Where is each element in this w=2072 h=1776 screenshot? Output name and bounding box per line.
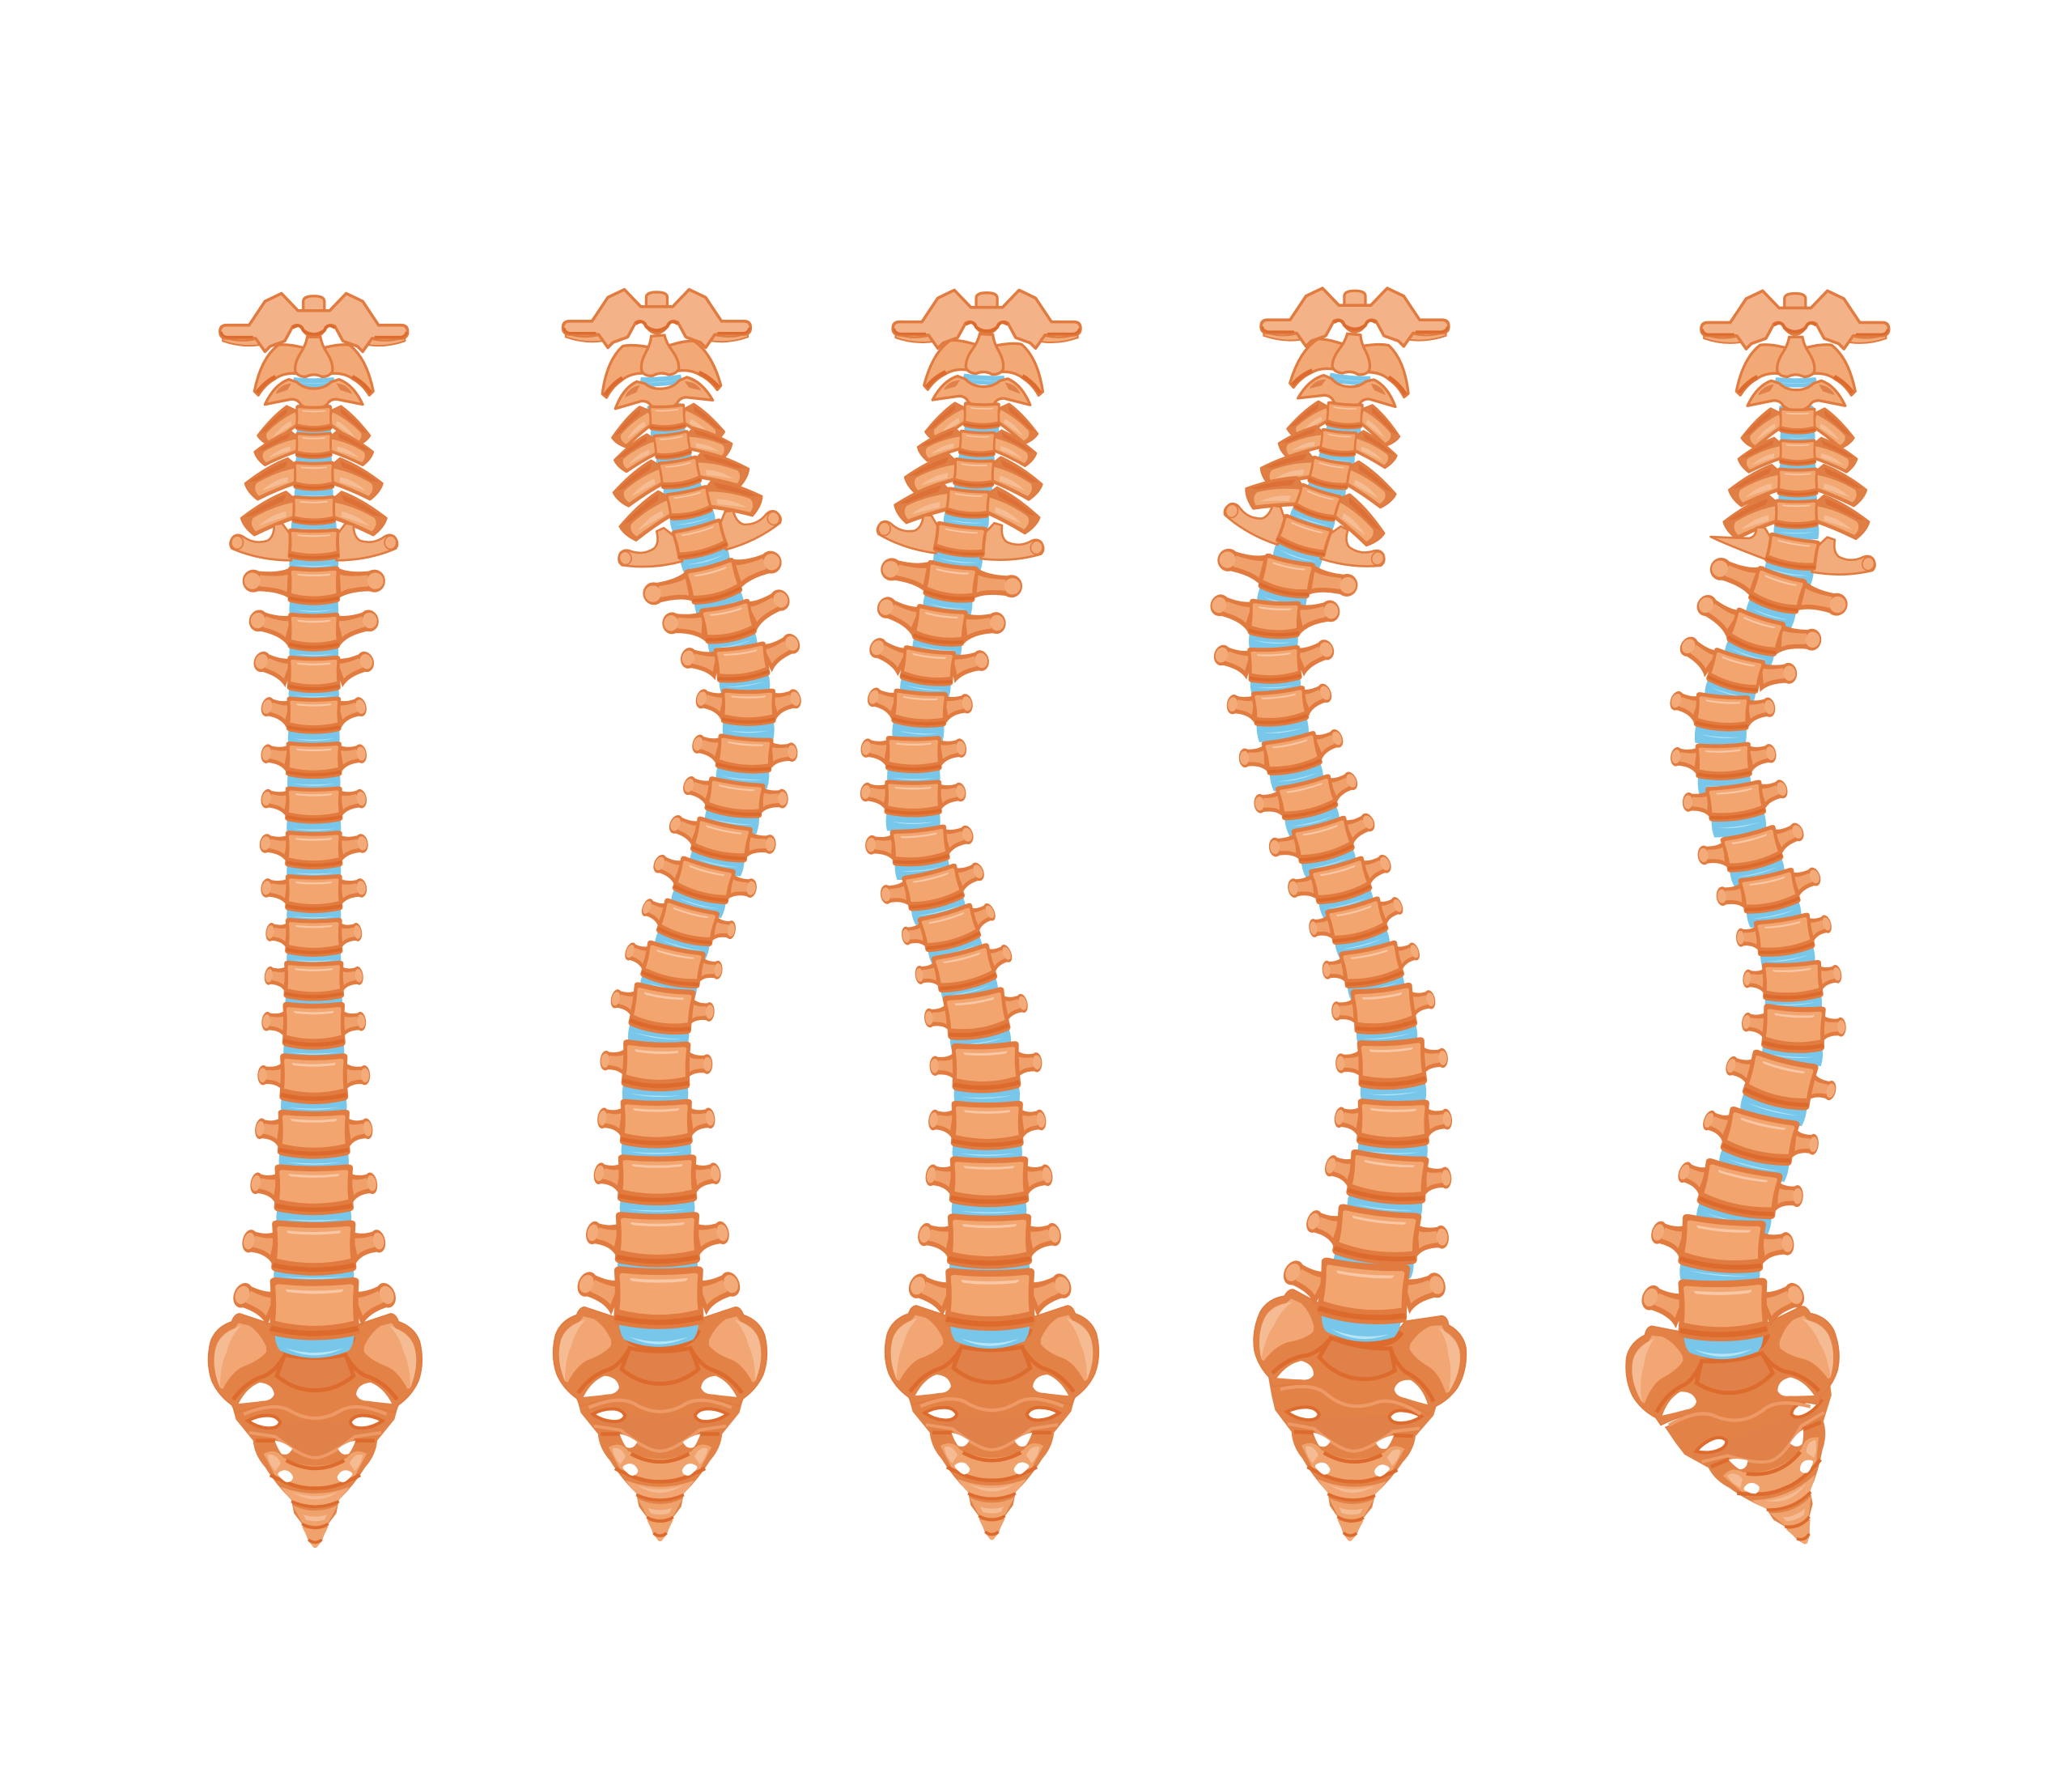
spine 3: curve bulging left	[858, 290, 1098, 1540]
skull base and cervical vertebrae	[1240, 288, 1449, 551]
spine 4: S-curve with thoracic bulge left	[1204, 288, 1473, 1544]
thoracic and lumbar vertebrae	[1635, 517, 1879, 1361]
pelvis and sacrum	[209, 1314, 422, 1548]
spine 1: straight	[209, 294, 422, 1548]
skull base and cervical vertebrae	[1701, 291, 1889, 541]
skull base and cervical vertebrae	[220, 294, 408, 537]
pelvis and sacrum	[554, 1307, 766, 1541]
thoracic and lumbar vertebrae	[1204, 491, 1456, 1349]
thoracic and lumbar vertebrae	[858, 509, 1077, 1349]
skull base and cervical vertebrae	[893, 290, 1081, 536]
pelvis and sacrum	[885, 1306, 1098, 1540]
pelvis and sacrum	[1620, 1302, 1887, 1576]
skull base and cervical vertebrae	[563, 290, 766, 545]
thoracic and lumbar vertebrae	[227, 524, 401, 1358]
spine 5: double curve with tilted pelvis	[1620, 291, 1889, 1576]
thoracic and lumbar vertebrae	[571, 498, 810, 1347]
pelvis and sacrum	[1245, 1284, 1473, 1544]
spine 2: curve bulging right	[554, 290, 810, 1541]
